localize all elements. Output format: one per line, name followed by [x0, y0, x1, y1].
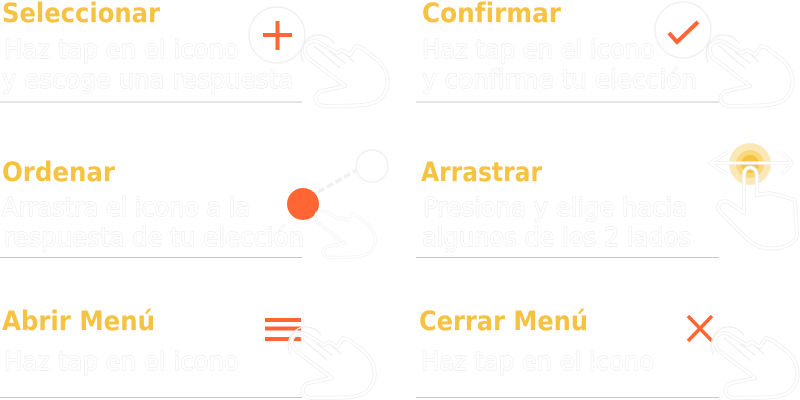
- text: ordenar description: [2, 193, 304, 253]
- heading: abrir menu: Abrir Menú: [2, 306, 155, 337]
- text: arrastrar description: [422, 193, 691, 253]
- text: seleccionar description: y escoge una respuesta: [2, 65, 293, 95]
- icon: tapping hand: [288, 327, 375, 398]
- icon: tapping hand: [706, 35, 793, 106]
- icon: plus in circle: [249, 7, 305, 63]
- icon: press target with side arrows: [710, 143, 792, 185]
- text: arrastrar description: algunos de los 2 lados: [422, 223, 691, 253]
- icon: check in circle: [655, 2, 711, 58]
- icon: tapping hand: [711, 327, 798, 398]
- icon: drag path with circles: [287, 150, 388, 220]
- panel: confirmar: [416, 0, 793, 106]
- panel: cerrar menu: [416, 306, 798, 398]
- icon: tapping hand: [315, 211, 375, 257]
- text: cerrar menu description: Haz tap en el icono: [421, 347, 654, 377]
- text: seleccionar description: [2, 35, 293, 95]
- icon: pressing hand: [718, 168, 797, 248]
- icon: close x: [688, 316, 712, 341]
- text: confirmar description: y confirme tu elección: [422, 65, 697, 95]
- text: ordenar description: respuesta de tu elección: [4, 223, 304, 253]
- text: confirmar description: Haz tap en el icono: [422, 35, 655, 65]
- icon: hamburger menu: [265, 320, 301, 339]
- icon: tapping hand: [301, 35, 388, 106]
- heading: cerrar menu: Cerrar Menú: [419, 306, 588, 337]
- heading: ordenar: Ordenar: [2, 157, 116, 188]
- text: abrir menu description: Haz tap en el icono: [4, 347, 239, 377]
- text: seleccionar description: Haz tap en el icono: [4, 35, 239, 65]
- text: arrastrar description: Presiona y elige hacia: [423, 193, 687, 223]
- panel: seleccionar: [0, 0, 388, 106]
- panel: arrastrar: [416, 143, 797, 258]
- panel: ordenar: [0, 150, 388, 258]
- heading: arrastrar: Arrastrar: [421, 157, 543, 188]
- panel: abrir menu: [0, 306, 375, 398]
- text: confirmar description: [422, 35, 697, 95]
- text: ordenar description: Arrastra el icono a la: [2, 193, 250, 223]
